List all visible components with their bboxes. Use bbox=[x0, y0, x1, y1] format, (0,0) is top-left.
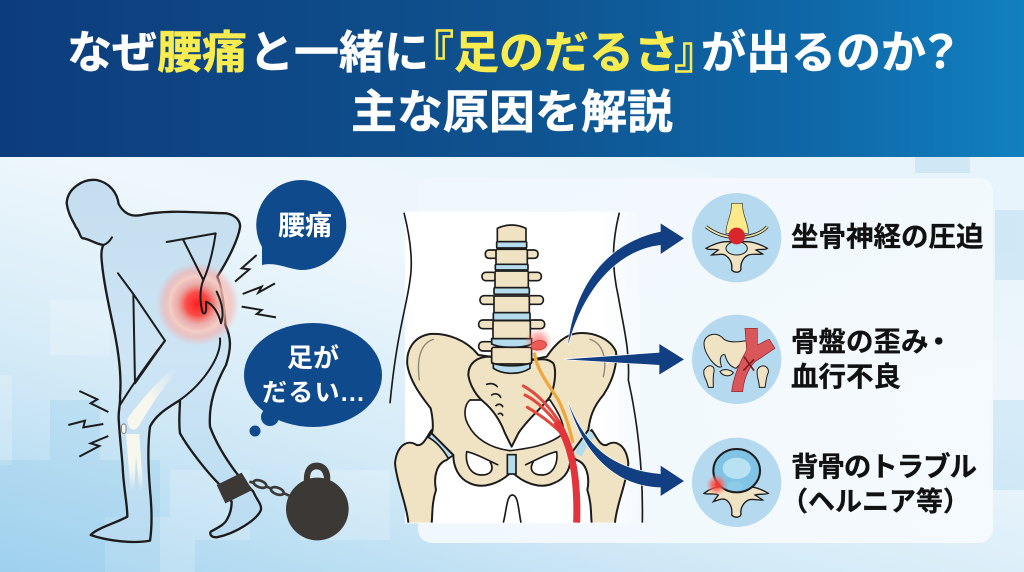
thought bubble: heavy legs: 足が bbox=[287, 343, 339, 373]
speech bubble: low back pain bbox=[256, 180, 346, 270]
knee bones bbox=[122, 368, 176, 492]
label: spine trouble: （ヘルニア等） bbox=[781, 487, 970, 517]
label: pelvis distortion and poor circulation: 骨盤の歪み bbox=[791, 326, 928, 357]
title line 1: と一緒に bbox=[249, 27, 429, 78]
hip joints bbox=[428, 428, 595, 458]
lumbar vertebrae bbox=[479, 225, 545, 364]
pain glow bbox=[156, 262, 239, 346]
icon: pelvis distortion and poor circulation bbox=[692, 315, 781, 404]
icon: spine trouble bbox=[692, 438, 781, 527]
title line 1: 』 bbox=[674, 27, 719, 78]
label: pelvis distortion and poor circulation bbox=[791, 326, 952, 392]
anatomy: pelvis and spine bbox=[390, 212, 684, 523]
label: spine trouble bbox=[781, 451, 977, 517]
panel: anatomy and causes bbox=[418, 178, 993, 543]
white backing bbox=[405, 212, 643, 523]
label: pelvis distortion and poor circulation: 血行不良 bbox=[791, 361, 901, 392]
sacrum bbox=[468, 357, 555, 447]
background bbox=[0, 157, 1024, 572]
pubic symphysis bbox=[507, 455, 516, 474]
femurs bbox=[395, 430, 628, 523]
title line 1: なぜ bbox=[67, 27, 157, 78]
lightning marks bbox=[68, 255, 276, 457]
figure: bent man with low back pain bbox=[67, 180, 349, 542]
sacral foramina bbox=[487, 384, 503, 415]
title line 1: 足のだるさ bbox=[454, 27, 679, 78]
icon: sciatic nerve compression bbox=[692, 193, 781, 282]
ankle cuff, chain and iron ball bbox=[217, 463, 349, 540]
label: spine trouble: 背骨のトラブル bbox=[791, 451, 977, 482]
speech bubble: low back pain: 腰痛 bbox=[278, 211, 332, 241]
title line 1: 『 bbox=[409, 27, 454, 78]
title line 1: 腰痛 bbox=[157, 27, 247, 78]
arrow: to pelvis distortion bbox=[565, 344, 684, 375]
label: pelvis distortion and poor circulation: ・ bbox=[925, 326, 952, 357]
nerves bbox=[523, 354, 577, 523]
thought bubble: heavy legs: だるい... bbox=[262, 379, 364, 407]
body inner lines bbox=[103, 233, 223, 405]
title banner bbox=[0, 0, 1024, 157]
title line 1: ？ bbox=[918, 27, 963, 78]
pelvic openings bbox=[465, 400, 564, 475]
pelvis bbox=[407, 333, 616, 486]
lower midline bbox=[503, 495, 521, 523]
label: sciatic nerve compression: 坐骨神経の圧迫 bbox=[791, 221, 984, 252]
intervertebral discs bbox=[492, 242, 532, 373]
arrow: to sciatic nerve compression bbox=[568, 223, 684, 344]
body silhouette bbox=[67, 180, 261, 542]
arrow: to spine trouble bbox=[568, 403, 684, 496]
body outline bbox=[390, 213, 642, 523]
thought bubble: heavy legs bbox=[244, 323, 382, 436]
title line 2: 主な原因を解説 bbox=[351, 86, 673, 138]
cause icons bbox=[692, 193, 781, 527]
title line 1: が出るのか bbox=[701, 27, 926, 78]
disc compression spot bbox=[524, 328, 552, 356]
cause labels bbox=[781, 221, 984, 517]
